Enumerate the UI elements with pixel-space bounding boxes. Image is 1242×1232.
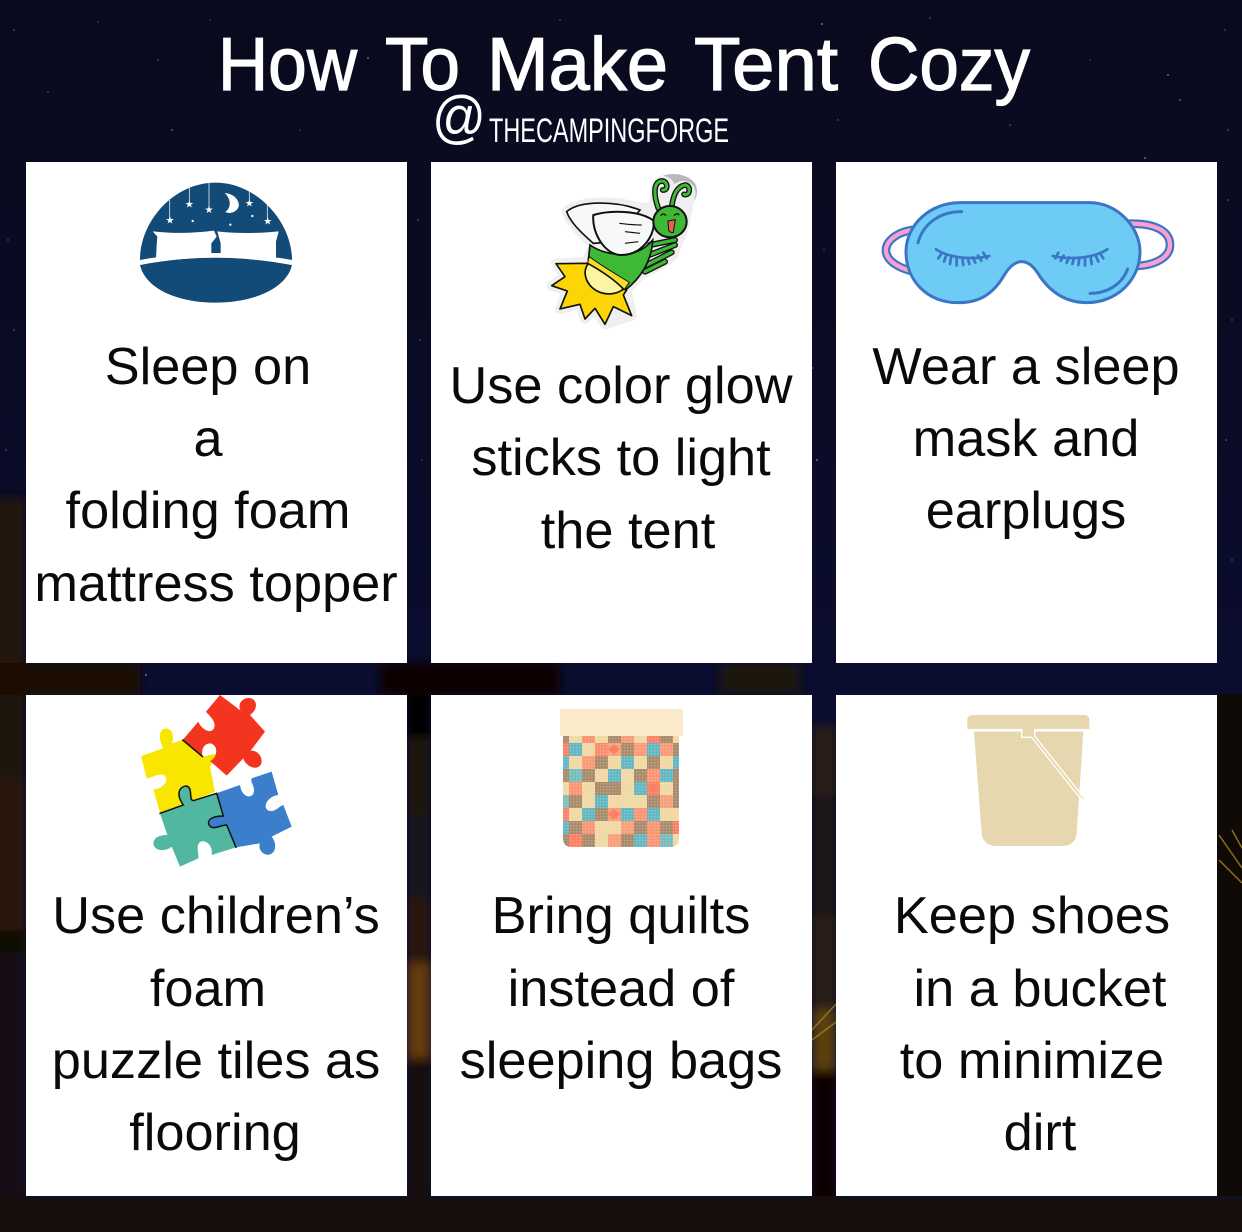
text: Sleep on	[105, 338, 311, 396]
icon: bed under starry night: ★	[263, 216, 272, 227]
handle: @thecampingforge: THECAMPINGFORGE	[489, 112, 729, 150]
icon: sleep mask	[886, 203, 1170, 303]
text: Wear a sleep	[872, 338, 1180, 396]
icon: bed under starry night	[140, 183, 292, 303]
text: in a bucket	[914, 960, 1167, 1018]
text: Use color glow	[450, 357, 793, 415]
bottom strip	[0, 1196, 1242, 1232]
text: mattress topper	[34, 555, 398, 613]
text	[872, 338, 1180, 540]
panel: quilts	[431, 695, 812, 1196]
icon: bed under starry night: ★	[166, 216, 175, 227]
icon: bed under starry night: ★	[185, 200, 194, 211]
panel: shoes in a bucket	[836, 695, 1217, 1196]
text: earplugs	[926, 482, 1126, 540]
left edge	[0, 498, 26, 663]
title: To	[385, 22, 460, 106]
icon: bed under starry night: ★	[205, 205, 214, 216]
text: to minimize	[900, 1032, 1164, 1090]
panel: color glow sticks	[431, 162, 812, 663]
text	[460, 887, 782, 1090]
panel: foam puzzle tiles	[26, 695, 407, 1196]
text: mask and	[913, 410, 1139, 468]
text: flooring	[129, 1104, 301, 1162]
text: Keep shoes	[894, 887, 1170, 945]
text: the tent	[541, 502, 716, 560]
title: Cozy	[868, 22, 1030, 106]
icon: bed under starry night: ★	[245, 198, 254, 209]
text	[450, 357, 793, 560]
icon: patchwork quilt bag	[560, 709, 683, 847]
text: a	[193, 410, 223, 468]
panel: sleep on foam mattress topper	[26, 162, 407, 663]
text: folding foam	[66, 482, 350, 540]
text	[34, 338, 398, 613]
gutter 2	[720, 663, 800, 695]
text: sleeping bags	[460, 1032, 782, 1090]
text	[52, 887, 380, 1162]
icon: puzzle pieces	[141, 695, 292, 867]
title	[218, 22, 1030, 106]
text: puzzle tiles as	[52, 1032, 380, 1090]
text: Use children’s	[52, 887, 380, 945]
handle: @thecampingforge	[432, 85, 729, 150]
title: Tent	[694, 22, 838, 106]
gutter 1	[380, 663, 560, 695]
title: Make	[487, 22, 668, 106]
text: dirt	[1004, 1104, 1077, 1162]
panel: sleep mask and earplugs	[836, 162, 1217, 663]
icon: bucket	[967, 715, 1089, 846]
text: Bring quilts	[492, 887, 750, 945]
title: How	[218, 22, 358, 106]
text: instead of	[508, 960, 735, 1018]
text	[894, 887, 1170, 1162]
icon: firefly sticker	[552, 174, 697, 324]
text: foam	[150, 960, 266, 1018]
text: sticks to light	[471, 429, 771, 487]
handle: @thecampingforge: @	[432, 85, 486, 150]
